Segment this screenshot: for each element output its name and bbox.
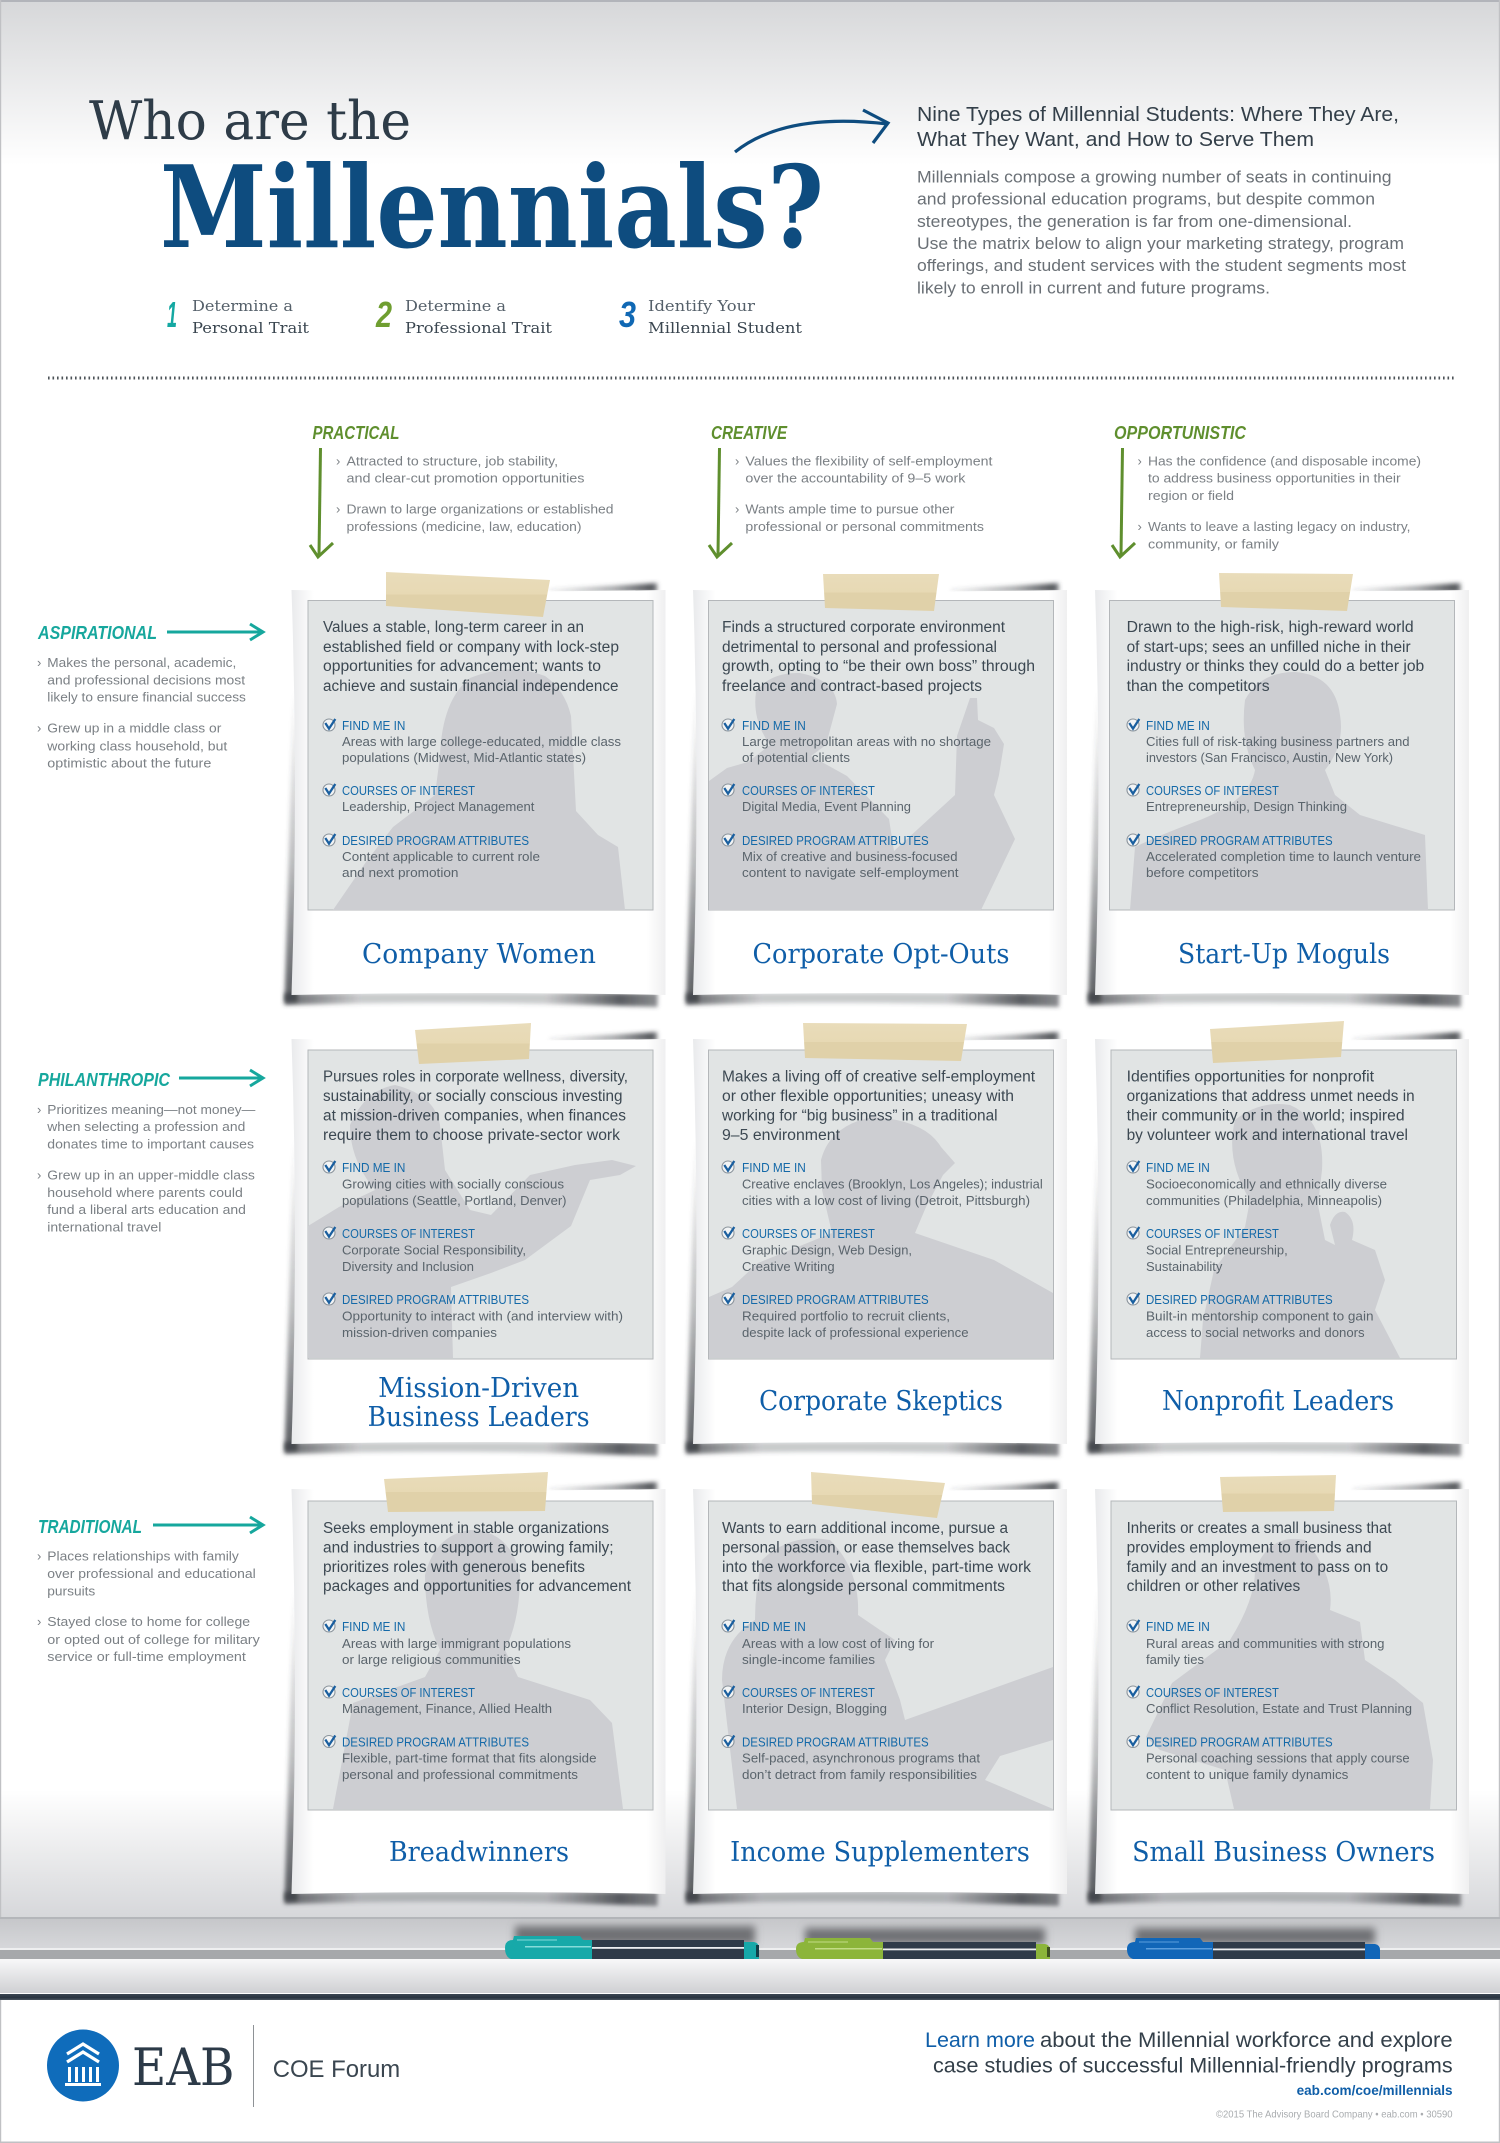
desired program attributes — [1127, 1293, 1374, 1340]
desired program attributes: Personal coaching sessions that apply course — [1146, 1752, 1410, 1766]
row header: Philanthropic: fund a liberal arts education and — [47, 1202, 246, 1217]
call to action: about the Millennial workforce and explore — [1040, 2029, 1453, 2052]
desired program attributes: DESIRED PROGRAM ATTRIBUTES — [742, 1736, 929, 1750]
courses of interest — [1127, 1227, 1288, 1274]
description — [1127, 619, 1424, 695]
find me in: Areas with large immigrant populations — [342, 1637, 571, 1651]
intro paragraph: offerings, and student services with the student segments most — [917, 257, 1406, 275]
description: of start-ups; sees an unfilled niche in their — [1127, 639, 1411, 656]
row header: Philanthropic: household where parents could — [47, 1185, 243, 1200]
courses of interest: COURSES OF INTEREST — [742, 1227, 875, 1241]
row header: Traditional: pursuits — [47, 1584, 96, 1598]
description: growth, opting to “be their own boss” through — [722, 658, 1035, 675]
card: Mission-Driven Business Leaders — [284, 1023, 666, 1456]
column header: Creative: › — [735, 454, 739, 468]
desired program attributes — [722, 1736, 981, 1782]
description: Finds a structured corporate environment — [722, 619, 1006, 636]
card name: Corporate Skeptics — [759, 1386, 1003, 1417]
subtitle: Nine Types of Millennial Students: Where They Are, — [917, 104, 1399, 126]
tape — [1219, 573, 1353, 611]
silhouette — [333, 1530, 623, 1809]
description — [323, 619, 619, 695]
step 1: Personal Trait — [192, 319, 309, 337]
row header: Philanthropic — [37, 1070, 263, 1234]
description: than the competitors — [1127, 678, 1270, 695]
photo panel — [308, 1050, 653, 1359]
desired program attributes — [1127, 1736, 1410, 1782]
find me in: FIND ME IN — [1146, 1161, 1210, 1175]
description: that fits alongside personal commitments — [722, 1578, 1005, 1595]
description: Inherits or creates a small business that — [1127, 1520, 1392, 1537]
column header: Practical: Attracted to structure, job stability, — [346, 454, 558, 468]
step 1 — [167, 294, 309, 337]
EAB logo: EAB — [132, 2039, 234, 2098]
find me in — [323, 719, 621, 765]
tape — [1210, 1021, 1344, 1063]
step 3: Identify Your — [648, 297, 756, 315]
column header: Practical — [310, 423, 614, 557]
footer bar — [0, 1993, 1500, 2000]
column header: Creative: professional or personal commitments — [745, 519, 984, 534]
desired program attributes: and next promotion — [342, 866, 459, 880]
card name: Company Women — [362, 939, 596, 970]
card name: Start-Up Moguls — [1178, 939, 1390, 970]
row header: Traditional: service or full-time employment — [47, 1649, 246, 1664]
desired program attributes — [323, 1736, 597, 1782]
silhouette — [333, 669, 625, 910]
photo panel — [1111, 1050, 1456, 1359]
arrow: title to intro — [735, 110, 888, 152]
arrow: creative — [709, 448, 732, 557]
photo panel — [1110, 600, 1454, 910]
card: Corporate Opt-Outs — [686, 574, 1067, 1007]
intro paragraph: Millennials compose a growing number of seats in continuing — [917, 168, 1392, 186]
intro paragraph: and professional education programs, but despite common — [917, 190, 1375, 208]
subtitle — [917, 104, 1399, 151]
step 2: Professional Trait — [405, 319, 552, 337]
step 2: Determine a — [405, 297, 506, 315]
description: personal passion, or ease themselves back — [722, 1540, 1010, 1556]
card: Income Supplementers — [686, 1472, 1067, 1906]
desired program attributes: personal and professional commitments — [342, 1768, 578, 1782]
description: provides employment to friends and — [1127, 1540, 1372, 1556]
row header: Traditional: over professional and educational — [47, 1566, 256, 1581]
intro paragraph: Use the matrix below to align your marketing strategy, program — [917, 235, 1404, 253]
marker: blue — [1127, 1928, 1380, 1959]
description: Makes a living off of creative self-employment — [722, 1068, 1036, 1086]
row header: Aspirational: › — [37, 720, 41, 736]
desired program attributes: DESIRED PROGRAM ATTRIBUTES — [342, 834, 529, 848]
tape — [1220, 1475, 1336, 1512]
title line: Millennials?: Millennials? — [160, 141, 824, 274]
column header: Practical: professions (medicine, law, education) — [346, 519, 582, 534]
find me in: investors (San Francisco, Austin, New York) — [1146, 751, 1393, 765]
courses of interest — [323, 784, 535, 814]
intro paragraph — [917, 168, 1406, 298]
card name: Income Supplementers — [730, 1837, 1030, 1868]
courses of interest: Entrepreneurship, Design Thinking — [1146, 800, 1347, 814]
column header: Creative — [709, 423, 993, 557]
find me in: Areas with large college-educated, middle class — [342, 735, 621, 749]
courses of interest: Digital Media, Event Planning — [742, 800, 911, 814]
step 3: 3 — [619, 294, 636, 335]
row header: Aspirational: and professional decisions most — [47, 672, 246, 688]
description: Pursues roles in corporate wellness, diversity, — [323, 1068, 628, 1086]
courses of interest — [722, 1227, 912, 1274]
desired program attributes: Opportunity to interact with (and interview with) — [342, 1310, 623, 1324]
call to action: Learn more — [925, 2029, 1035, 2052]
courses of interest: Leadership, Project Management — [342, 800, 535, 814]
title line: Who are the: Who are the — [89, 91, 411, 152]
row header: Aspirational: › — [37, 655, 41, 670]
desired program attributes: don’t detract from family responsibilities — [742, 1768, 977, 1782]
desired program attributes — [323, 1293, 623, 1340]
tape — [803, 1023, 967, 1061]
column header: Opportunistic — [1112, 423, 1421, 557]
courses of interest: COURSES OF INTEREST — [742, 784, 875, 798]
card: Nonprofit Leaders — [1088, 1021, 1469, 1456]
find me in: or large religious communities — [342, 1653, 521, 1667]
column header: Opportunistic: › — [1138, 519, 1142, 534]
courses of interest: COURSES OF INTEREST — [1146, 1227, 1279, 1241]
find me in: communities (Philadelphia, Minneapolis) — [1146, 1194, 1382, 1208]
find me in: Cities full of risk-taking business partners and — [1146, 735, 1410, 749]
description: their community or in the world; inspired — [1127, 1108, 1405, 1124]
courses of interest: Graphic Design, Web Design, — [742, 1244, 912, 1258]
call to action: eab.com/coe/millennials — [1297, 2083, 1453, 2098]
tape — [384, 1472, 548, 1512]
row header: Philanthropic: Grew up in an upper-middle class — [47, 1168, 255, 1182]
description: opportunities for advancement; wants to — [323, 658, 601, 675]
arrow: philanthropic — [179, 1070, 263, 1086]
find me in — [722, 1161, 1043, 1208]
description: or other flexible opportunities; uneasy with — [722, 1088, 1014, 1105]
description — [722, 1520, 1031, 1595]
find me in — [1127, 1161, 1387, 1208]
row header: Traditional: Places relationships with family — [47, 1548, 239, 1564]
column header: Creative: over the accountability of 9–5 work — [745, 470, 966, 486]
EAB logo — [47, 2025, 400, 2107]
description: detrimental to personal and professional — [722, 639, 997, 656]
description — [323, 1068, 628, 1144]
find me in: populations (Seattle, Portland, Denver) — [342, 1194, 566, 1208]
desired program attributes: Accelerated completion time to launch venture — [1146, 850, 1421, 864]
marker: teal — [505, 1926, 759, 1959]
desired program attributes: Flexible, part-time format that fits alongside — [342, 1752, 597, 1766]
silhouette — [1200, 1104, 1400, 1358]
description: at mission-driven companies, when finances — [323, 1108, 626, 1124]
description: achieve and sustain financial independence — [323, 678, 618, 695]
column header: Opportunistic: Wants to leave a lasting legacy on industry, — [1148, 519, 1410, 534]
find me in: FIND ME IN — [742, 1161, 806, 1175]
column header: Practical: › — [336, 454, 340, 468]
silhouette — [1146, 1539, 1433, 1809]
silhouette — [709, 1117, 1053, 1358]
column header: Opportunistic: to address business opportunities in their — [1148, 470, 1401, 486]
silhouette — [1130, 672, 1428, 910]
courses of interest — [1127, 1686, 1412, 1716]
row header: Philanthropic: when selecting a profession and — [46, 1119, 245, 1134]
description — [1127, 1520, 1392, 1595]
find me in: cities with a low cost of living (Detroit, Pittsburgh) — [742, 1194, 1030, 1208]
desired program attributes: DESIRED PROGRAM ATTRIBUTES — [742, 834, 929, 848]
find me in: Creative enclaves (Brooklyn, Los Angeles); industrial — [742, 1178, 1043, 1192]
find me in: Large metropolitan areas with no shortage — [742, 735, 991, 749]
courses of interest: Sustainability — [1146, 1260, 1223, 1274]
row header: Philanthropic: international travel — [47, 1220, 161, 1234]
find me in: Growing cities with socially conscious — [342, 1178, 564, 1192]
description: Identifies opportunities for nonprofit — [1127, 1068, 1375, 1086]
step 3 — [619, 294, 802, 337]
card: Corporate Skeptics — [686, 1023, 1067, 1456]
description: prioritizes roles with generous benefits — [323, 1559, 585, 1576]
description — [721, 1068, 1036, 1144]
row header: Aspirational — [37, 623, 263, 770]
arrow: opportunistic — [1112, 448, 1135, 557]
card name: Mission-Driven — [378, 1373, 579, 1404]
description: by volunteer work and international travel — [1127, 1127, 1408, 1144]
description: freelance and contract-based projects — [722, 678, 982, 695]
description: require them to choose private-sector work — [323, 1127, 620, 1144]
row header: Aspirational: working class household, but — [46, 738, 228, 754]
column header: Practical: Drawn to large organizations or established — [346, 502, 614, 516]
desired program attributes: DESIRED PROGRAM ATTRIBUTES — [342, 1293, 529, 1307]
column header: Opportunistic: OPPORTUNISTIC — [1114, 423, 1247, 443]
step 1: 1 — [167, 294, 177, 335]
courses of interest — [323, 1686, 552, 1716]
row header: Traditional: › — [37, 1614, 41, 1629]
card name: Breadwinners — [389, 1837, 569, 1868]
courses of interest: COURSES OF INTEREST — [1146, 1686, 1279, 1700]
card: Company Women — [284, 572, 666, 1007]
row header: Aspirational: optimistic about the future — [47, 756, 211, 770]
description: packages and opportunities for advancement — [323, 1578, 632, 1595]
find me in: Areas with a low cost of living for — [742, 1637, 934, 1651]
EAB logo: COE Forum — [273, 2056, 400, 2083]
courses of interest: Creative Writing — [742, 1260, 835, 1274]
desired program attributes: Content applicable to current role — [342, 850, 540, 864]
find me in: FIND ME IN — [1146, 1620, 1210, 1634]
silhouette — [722, 1539, 1053, 1809]
desired program attributes: DESIRED PROGRAM ATTRIBUTES — [742, 1293, 929, 1307]
description: 9–5 environment — [722, 1127, 841, 1144]
card: Small Business Owners — [1088, 1475, 1469, 1906]
row header: Philanthropic: donates time to important causes — [47, 1136, 255, 1152]
row header: Aspirational: likely to ensure financial success — [47, 690, 246, 704]
column header: Creative: › — [735, 502, 739, 516]
description: and industries to support a growing family; — [323, 1540, 614, 1556]
desired program attributes: Required portfolio to recruit clients, — [742, 1310, 950, 1324]
courses of interest: COURSES OF INTEREST — [742, 1686, 875, 1700]
desired program attributes — [722, 834, 959, 880]
tray front lip — [0, 1959, 1500, 1993]
intro paragraph: likely to enroll in current and future programs. — [917, 280, 1270, 298]
column header: Opportunistic: › — [1138, 454, 1142, 468]
step 2 — [375, 294, 552, 337]
row header: Aspirational: Grew up in a middle class or — [47, 720, 222, 736]
desired program attributes — [1127, 834, 1421, 880]
desired program attributes: Mix of creative and business-focused — [742, 850, 958, 864]
row header: Philanthropic: › — [37, 1168, 41, 1182]
card name — [368, 1373, 590, 1433]
desired program attributes: content to navigate self-employment — [742, 866, 959, 880]
courses of interest: COURSES OF INTEREST — [342, 1227, 475, 1241]
courses of interest: Diversity and Inclusion — [342, 1260, 474, 1274]
courses of interest — [323, 1227, 526, 1274]
step 1: Determine a — [192, 297, 293, 315]
description: into the workforce via flexible, part-time work — [722, 1559, 1031, 1576]
desired program attributes: DESIRED PROGRAM ATTRIBUTES — [342, 1736, 529, 1750]
find me in: FIND ME IN — [1146, 719, 1210, 733]
description: working for “big business” in a traditional — [721, 1108, 998, 1124]
row header: Aspirational: ASPIRATIONAL — [37, 623, 157, 643]
desired program attributes: DESIRED PROGRAM ATTRIBUTES — [1146, 1293, 1333, 1307]
find me in: FIND ME IN — [742, 719, 806, 733]
arrow: practical — [310, 448, 333, 557]
description: Seeks employment in stable organizations — [323, 1520, 609, 1537]
row header: Aspirational: Makes the personal, academic, — [47, 655, 236, 670]
description — [1127, 1068, 1415, 1144]
tape — [386, 572, 550, 617]
photo panel — [308, 1501, 653, 1810]
desired program attributes: DESIRED PROGRAM ATTRIBUTES — [1146, 1736, 1333, 1750]
column header: Opportunistic: Has the confidence (and disposable income) — [1148, 454, 1421, 468]
photo panel — [1111, 1501, 1456, 1810]
courses of interest: Interior Design, Blogging — [742, 1702, 887, 1716]
row header: Traditional: › — [37, 1548, 41, 1564]
tape — [415, 1023, 531, 1064]
desired program attributes: mission-driven companies — [342, 1326, 497, 1340]
silhouette — [709, 673, 1015, 910]
courses of interest: Conflict Resolution, Estate and Trust Planning — [1146, 1702, 1412, 1716]
desired program attributes: content to unique family dynamics — [1146, 1768, 1348, 1782]
card name: Nonprofit Leaders — [1162, 1386, 1394, 1417]
courses of interest: Corporate Social Responsibility, — [342, 1244, 526, 1258]
card name: Business Leaders — [368, 1402, 590, 1433]
row header: Traditional — [37, 1517, 263, 1664]
find me in: FIND ME IN — [342, 1620, 405, 1634]
courses of interest: COURSES OF INTEREST — [342, 1686, 475, 1700]
marker: green — [796, 1928, 1050, 1959]
tape — [811, 1472, 945, 1518]
find me in: single-income families — [742, 1653, 875, 1667]
description: Drawn to the high-risk, high-reward world — [1127, 619, 1414, 636]
find me in — [1127, 1620, 1385, 1667]
desired program attributes: DESIRED PROGRAM ATTRIBUTES — [1146, 834, 1333, 848]
intro paragraph: stereotypes, the generation is far from one-dimensional. — [917, 213, 1352, 231]
column header: Creative: Wants ample time to pursue other — [745, 502, 955, 516]
column header: Practical: and clear-cut promotion opportunities — [346, 470, 585, 486]
desired program attributes — [323, 834, 540, 880]
call to action: ©2015 The Advisory Board Company • eab.com • 30590 — [1216, 2109, 1453, 2121]
find me in: FIND ME IN — [342, 1161, 405, 1175]
card: Start-Up Moguls — [1088, 573, 1469, 1007]
row header: Philanthropic: Prioritizes meaning—not money— — [47, 1102, 255, 1117]
find me in — [323, 1620, 571, 1667]
courses of interest — [1127, 784, 1347, 814]
description: established field or company with lock-step — [323, 639, 619, 656]
photo panel — [708, 1501, 1054, 1810]
description: family and an investment to pass on to — [1127, 1559, 1388, 1576]
column header: Creative: Values the flexibility of self-employment — [745, 454, 993, 468]
column header: Practical: › — [336, 502, 340, 516]
find me in: FIND ME IN — [342, 719, 405, 733]
desired program attributes: Built-in mentorship component to gain — [1146, 1310, 1374, 1324]
arrow: traditional — [153, 1517, 263, 1533]
card: Breadwinners — [284, 1472, 666, 1906]
photo panel — [708, 600, 1054, 910]
desired program attributes: access to social networks and donors — [1146, 1326, 1365, 1340]
find me in: of potential clients — [742, 751, 850, 765]
find me in: populations (Midwest, Mid-Atlantic states) — [342, 751, 586, 765]
row header: Philanthropic: › — [37, 1102, 41, 1117]
row header: Traditional: TRADITIONAL — [38, 1517, 142, 1537]
column header: Practical: PRACTICAL — [312, 423, 400, 443]
find me in — [323, 1161, 566, 1208]
row header: Traditional: or opted out of college for military — [47, 1632, 260, 1647]
photo panel — [308, 600, 653, 910]
arrow: aspirational — [167, 624, 263, 640]
courses of interest: Social Entrepreneurship, — [1146, 1244, 1288, 1258]
column header: Opportunistic: community, or family — [1148, 536, 1280, 552]
column header: Creative: CREATIVE — [711, 423, 788, 443]
silhouette — [308, 1085, 636, 1358]
description — [722, 619, 1035, 695]
card name: Corporate Opt-Outs — [752, 939, 1010, 970]
step 2: 2 — [375, 294, 392, 335]
courses of interest — [722, 784, 911, 814]
description: industry or thinks they could do a better job — [1127, 658, 1424, 675]
desired program attributes — [722, 1293, 969, 1340]
call to action: case studies of successful Millennial-friendly programs — [933, 2055, 1453, 2078]
courses of interest — [722, 1686, 887, 1716]
find me in: Rural areas and communities with strong — [1146, 1637, 1385, 1651]
courses of interest: COURSES OF INTEREST — [1146, 784, 1279, 798]
description: Values a stable, long-term career in an — [323, 619, 584, 636]
description: organizations that address unmet needs in — [1127, 1088, 1415, 1105]
courses of interest: Management, Finance, Allied Health — [342, 1702, 552, 1716]
find me in: family ties — [1146, 1653, 1204, 1667]
find me in — [1127, 719, 1410, 765]
desired program attributes: despite lack of professional experience — [742, 1326, 969, 1340]
find me in: FIND ME IN — [742, 1620, 806, 1634]
card name: Small Business Owners — [1132, 1837, 1435, 1868]
description — [323, 1520, 632, 1595]
logo mark — [47, 2030, 119, 2102]
photo panel — [708, 1050, 1054, 1359]
courses of interest: COURSES OF INTEREST — [342, 784, 475, 798]
call to action — [925, 2029, 1453, 2121]
description: sustainability, or socially conscious investing — [323, 1088, 622, 1105]
step 3: Millennial Student — [648, 319, 802, 337]
tape — [823, 574, 939, 611]
row header: Traditional: Stayed close to home for college — [47, 1614, 250, 1629]
find me in — [722, 719, 991, 765]
description: children or other relatives — [1127, 1578, 1300, 1595]
row header: Philanthropic: PHILANTHROPIC — [38, 1070, 171, 1090]
find me in — [722, 1620, 934, 1667]
title — [89, 91, 824, 274]
description: Wants to earn additional income, pursue a — [722, 1520, 1008, 1537]
whiteboard tray — [0, 1917, 1500, 1959]
desired program attributes: before competitors — [1146, 866, 1258, 880]
find me in: Socioeconomically and ethnically diverse — [1146, 1178, 1387, 1192]
column header: Opportunistic: region or field — [1148, 488, 1234, 503]
desired program attributes: Self-paced, asynchronous programs that — [742, 1752, 981, 1766]
subtitle: What They Want, and How to Serve Them — [917, 129, 1314, 151]
